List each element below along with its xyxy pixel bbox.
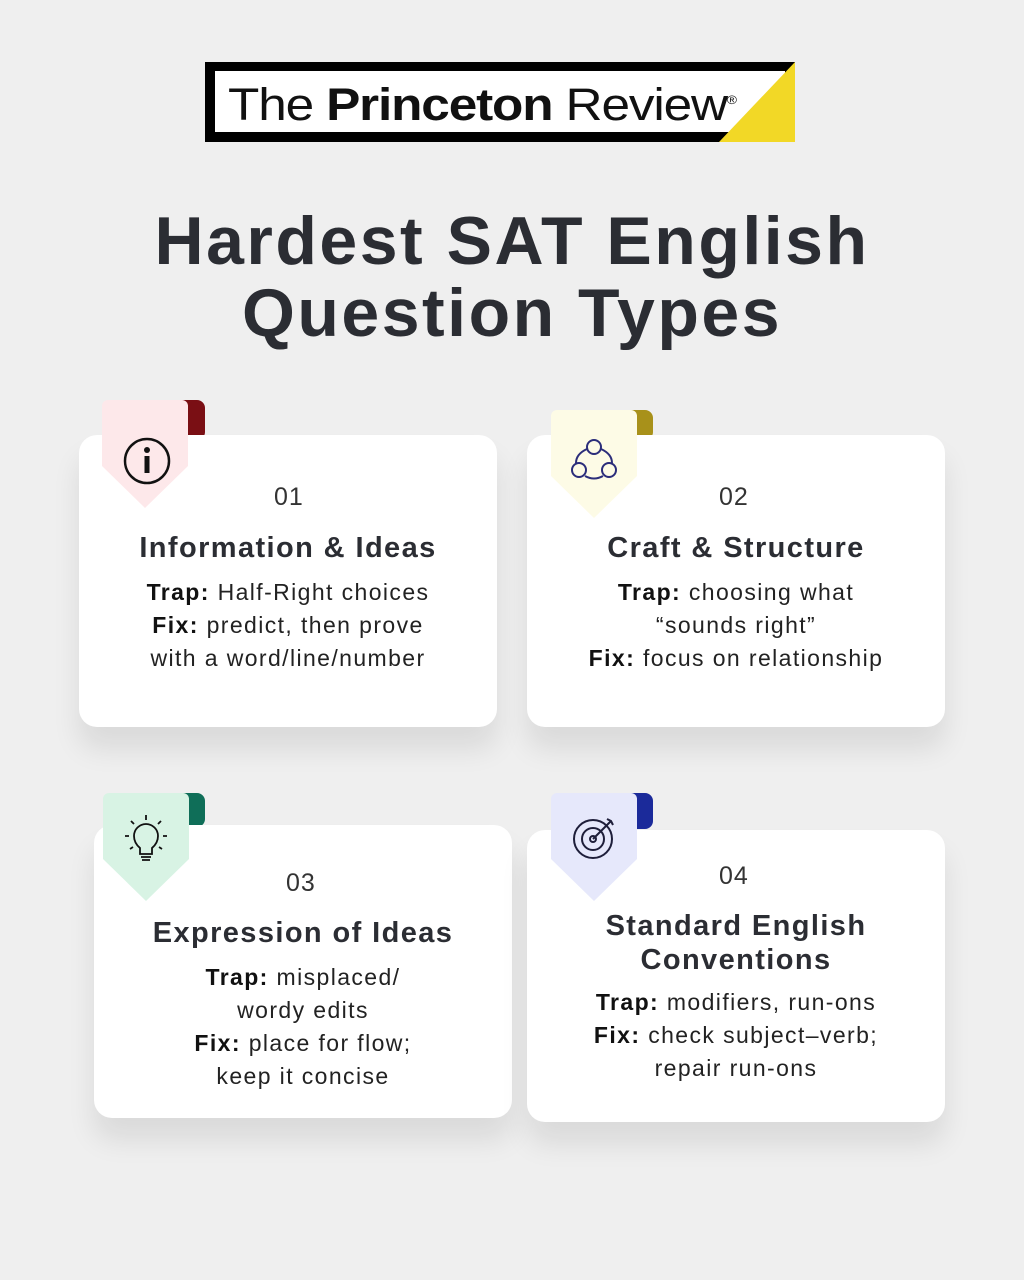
panel: card 2: Fix: focus on relationship: [589, 645, 883, 671]
icon: lightbulb: [103, 793, 189, 901]
logo: [205, 62, 795, 142]
title: Hardest SAT English: [154, 203, 870, 279]
icon: info: [102, 400, 188, 508]
panel: card 1: Trap: Half-Right choices: [147, 579, 429, 605]
panel: card 1: with a word/line/number: [150, 645, 426, 671]
panel: card 1: [75, 400, 501, 753]
panel: card 2: “sounds right”: [656, 612, 816, 638]
panel: card 2: Craft & Structure: [607, 532, 865, 564]
panel: card 4: Trap: modifiers, run-ons: [596, 989, 876, 1015]
panel: card 3: Expression of Ideas: [153, 917, 453, 949]
panel: card 3: Fix: place for flow;: [194, 1030, 412, 1056]
panel: card 4: Fix: check subject–verb;: [594, 1022, 878, 1048]
logo: The Princeton Review®: [228, 79, 736, 130]
icon: target: [551, 793, 637, 901]
panel: card 1: Information & Ideas: [139, 532, 437, 564]
panel: card 1: 01: [274, 483, 304, 511]
panel: card 3: 03: [286, 869, 316, 897]
panel: card 2: [523, 410, 949, 753]
panel: card 1: Fix: predict, then prove: [152, 612, 424, 638]
panel: card 4: repair run-ons: [655, 1055, 817, 1081]
icon: network: [551, 410, 637, 518]
panel: card 3: Trap: misplaced/: [206, 964, 400, 990]
panel: card 4: Conventions: [640, 944, 832, 976]
title: [154, 203, 870, 351]
panel: card 2: 02: [719, 483, 749, 511]
panel: card 4: [523, 793, 949, 1148]
panel: card 3: keep it concise: [216, 1063, 390, 1089]
panel: card 3: wordy edits: [237, 997, 369, 1023]
title: Question Types: [242, 275, 782, 351]
panel: card 2: Trap: choosing what: [618, 579, 854, 605]
panel: card 3: [90, 793, 516, 1144]
panel: card 4: 04: [719, 862, 749, 890]
panel: card 4: Standard English: [606, 910, 866, 942]
